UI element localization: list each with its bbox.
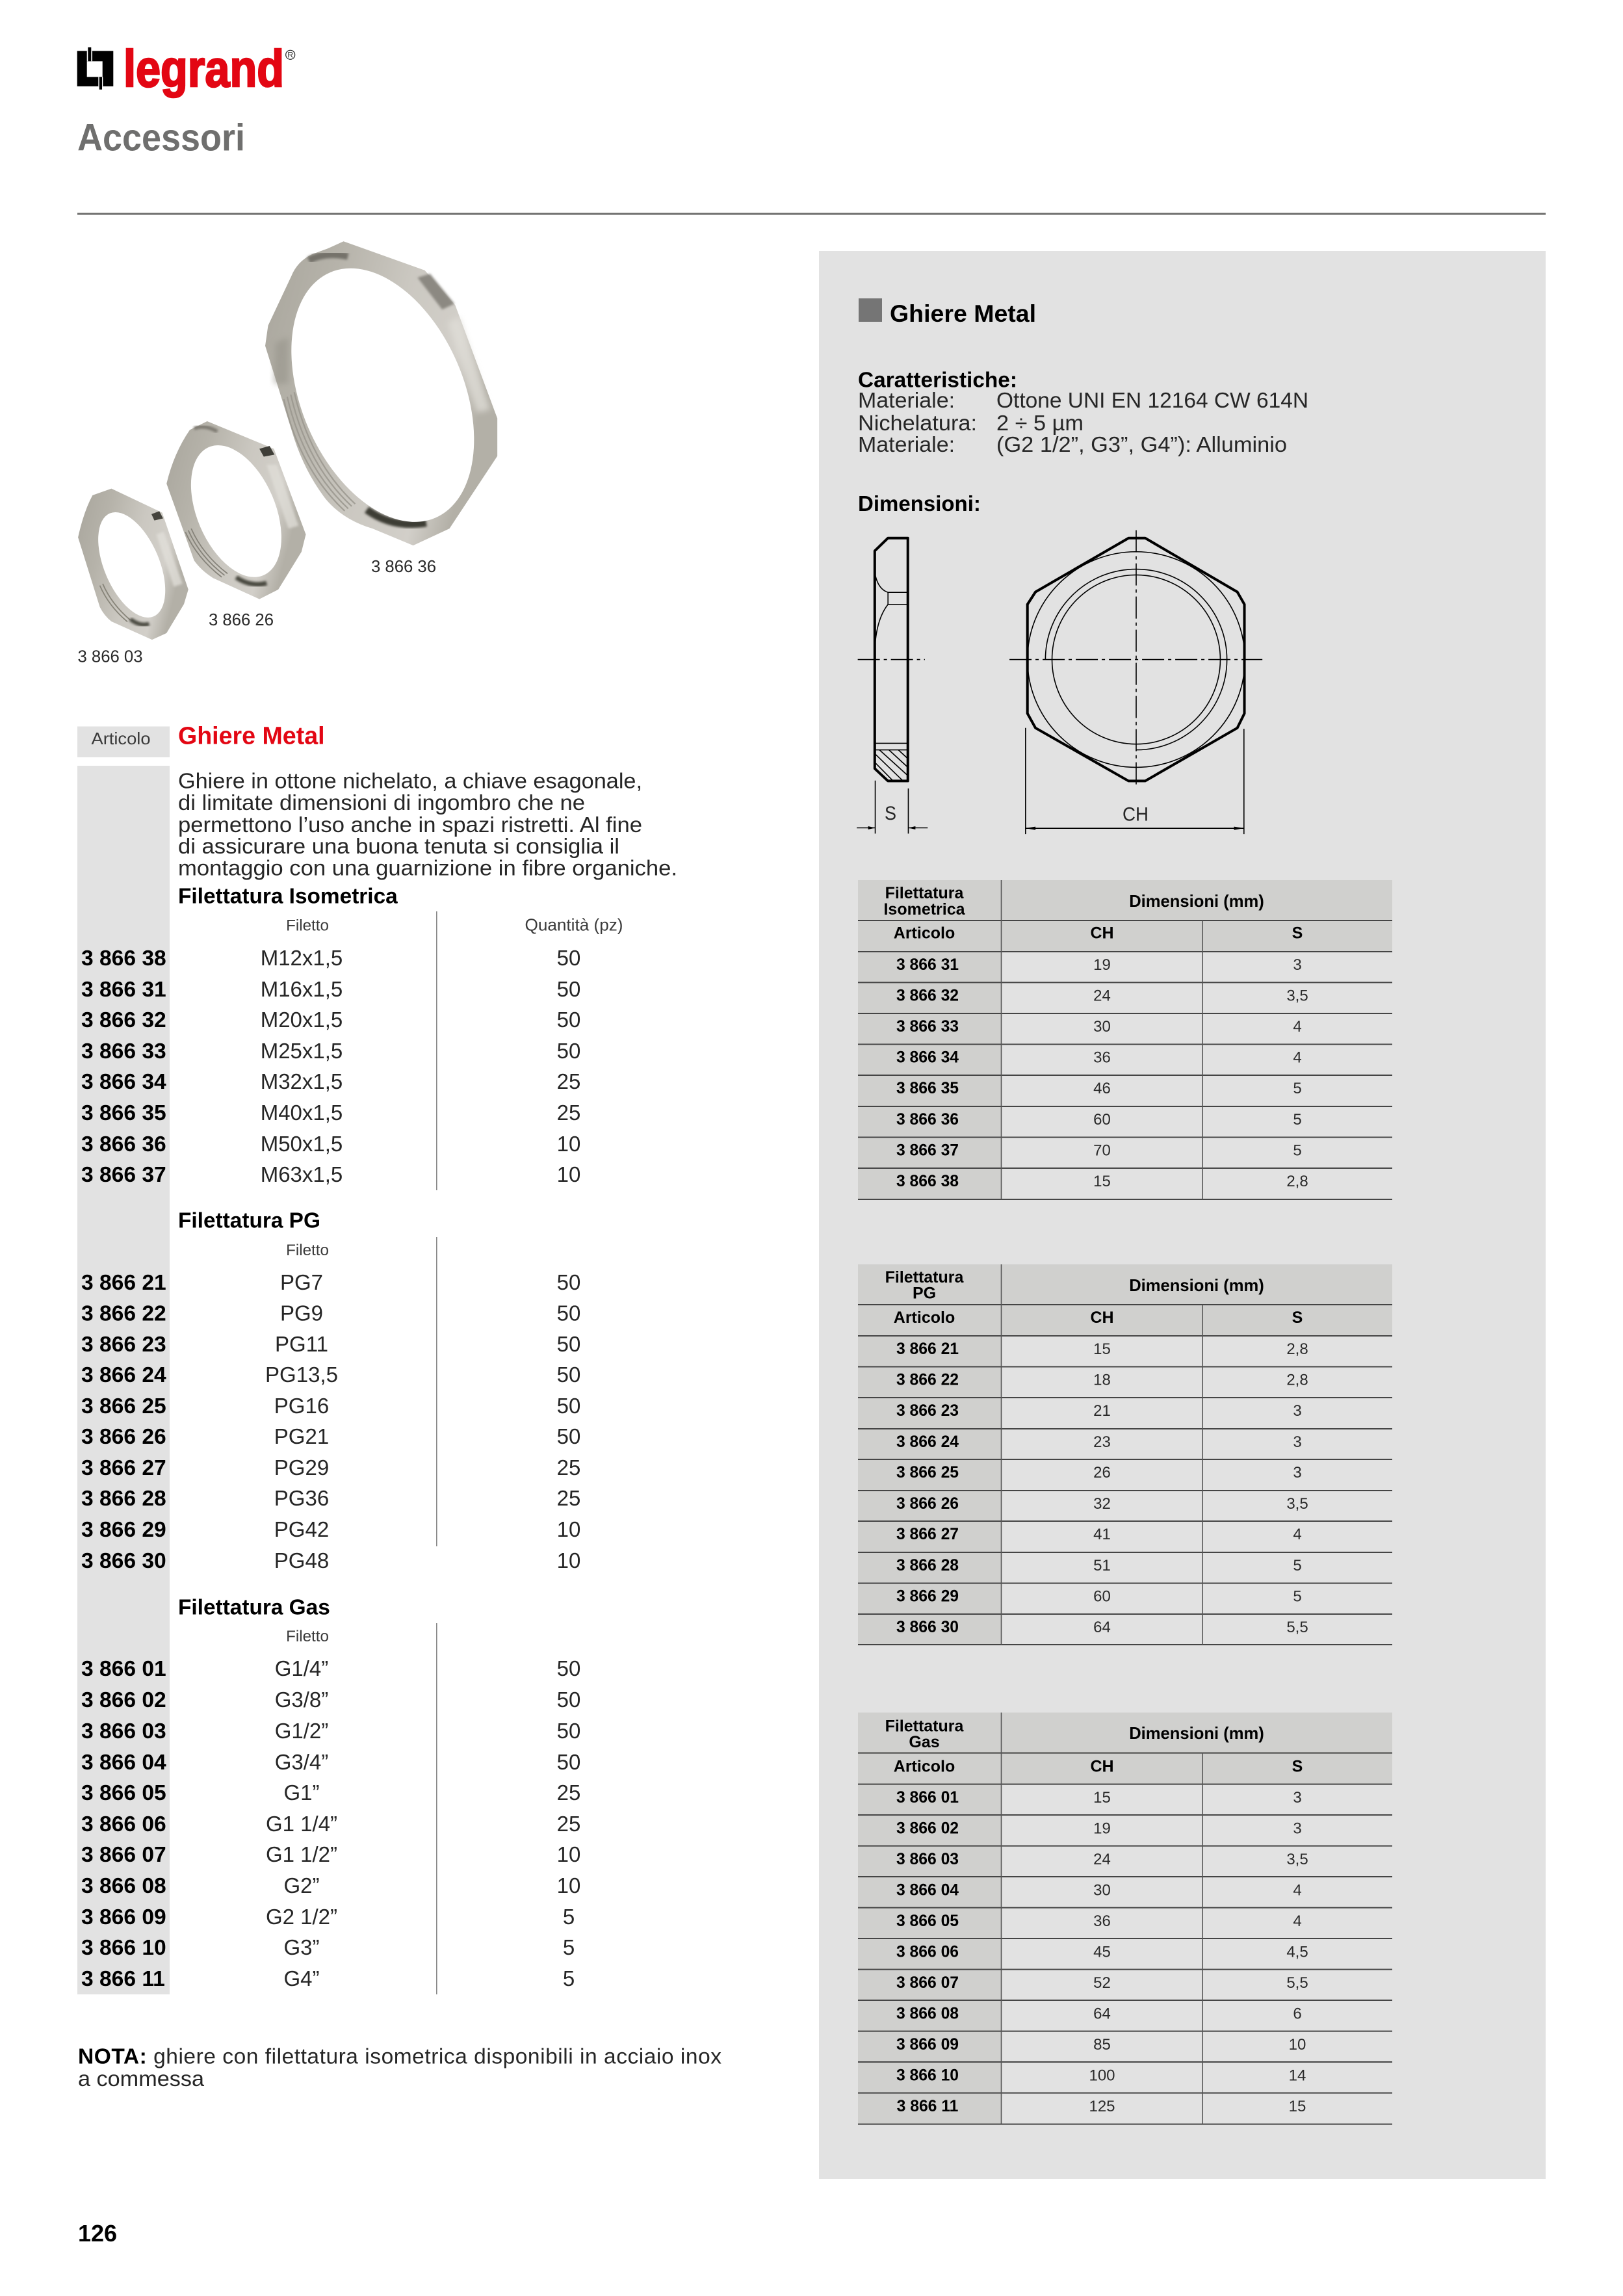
table rows: 19 (1093, 1820, 1111, 1837)
logo wordmark: legrand (123, 40, 284, 98)
table rows: 3 866 03 (896, 1851, 959, 1868)
row: 50 (557, 1656, 580, 1680)
row: 10 (557, 1873, 580, 1898)
row: PG13,5 (265, 1363, 338, 1387)
row: 3 866 33 (81, 1039, 166, 1063)
small nut (78, 489, 188, 640)
table rows: 3 866 10 (896, 2067, 959, 2084)
row: 3 866 26 (81, 1425, 166, 1449)
photo label: 3 866 03: 3 866 03 (78, 647, 143, 666)
table: Filettatura PG (858, 1264, 1392, 1645)
table rows: 3 866 32 (896, 987, 959, 1005)
characteristics text (858, 368, 1308, 456)
table rows: 3 866 09 (896, 2036, 959, 2054)
row: 3 866 30 (81, 1549, 166, 1573)
table header: Articolo (894, 1758, 955, 1776)
row: 3 866 09 (81, 1905, 166, 1929)
characteristics text: 2 ÷ 5 µm (996, 411, 1084, 435)
table rows: 30 (1093, 1881, 1111, 1899)
table rows: 3 (1293, 1820, 1302, 1837)
characteristics text: Ottone UNI EN 12164 CW 614N (996, 388, 1308, 412)
table rows: 3 866 24 (896, 1433, 959, 1451)
table: Filettatura Isometrica (858, 880, 1392, 1199)
row: 25 (557, 1486, 580, 1510)
table rows (896, 956, 1308, 1190)
row (81, 1008, 580, 1032)
table header (885, 1268, 1303, 1327)
row: G3/4” (275, 1750, 328, 1774)
table rows: 51 (1093, 1557, 1111, 1574)
dimension label: CH: CH (1123, 803, 1149, 826)
table header: S (1292, 924, 1303, 943)
table rows: 3 866 29 (896, 1587, 959, 1606)
table rows: 3,5 (1286, 1495, 1308, 1513)
row: 10 (557, 1132, 580, 1156)
table rows: 3 866 01 (896, 1789, 959, 1807)
table header: PG (913, 1285, 936, 1303)
row: 50 (557, 1270, 580, 1294)
table rows: 3 866 31 (896, 956, 959, 974)
table rows: 32 (1093, 1495, 1111, 1513)
table rows: 21 (1093, 1402, 1111, 1420)
row (81, 1517, 580, 1542)
row: 3 866 32 (81, 1008, 166, 1032)
heading: Accessori: Accessori (77, 117, 245, 159)
table rows: 5 (1293, 1080, 1302, 1097)
row: 3 866 07 (81, 1843, 166, 1867)
characteristics text: (G2 1/2”, G3”, G4”): Alluminio (996, 432, 1287, 456)
row: 3 866 23 (81, 1333, 166, 1357)
description text: Ghiere in ottone nichelato, a chiave esagonale, (178, 770, 642, 793)
section: Filettatura Gas (81, 1596, 580, 1994)
logo: legrand (77, 40, 295, 98)
row: 50 (557, 977, 580, 1001)
row: 10 (557, 1548, 580, 1572)
description text: montaggio con una guarnizione in fibre organiche. (178, 857, 677, 880)
heading: Ghiere Metal (red): Ghiere Metal (178, 722, 325, 749)
row (81, 1966, 575, 1991)
table header: CH (1090, 1758, 1114, 1776)
row: G3” (283, 1935, 320, 1959)
table rows: 14 (1289, 2067, 1306, 2084)
table rows: 4 (1293, 1912, 1302, 1930)
table rows: 3 866 37 (896, 1141, 959, 1160)
table rows: 3 866 25 (896, 1464, 959, 1481)
row: 3 866 34 (81, 1070, 166, 1094)
row (81, 1039, 580, 1063)
characteristics text: Nichelatura: (858, 411, 977, 435)
row: PG29 (274, 1455, 329, 1480)
row: PG11 (275, 1332, 328, 1356)
row: M32x1,5 (261, 1069, 343, 1093)
table rows: 15 (1289, 2098, 1306, 2115)
table rows: 70 (1093, 1141, 1111, 1160)
registered mark: R (287, 51, 293, 60)
row: 3 866 01 (81, 1657, 166, 1681)
table rows: 3 866 34 (896, 1049, 959, 1066)
row (81, 1486, 580, 1511)
row: G2” (283, 1873, 320, 1898)
row: 50 (557, 1424, 580, 1448)
table rows: 5 (1293, 1111, 1302, 1128)
column header: Filetto: Filetto (286, 1628, 329, 1645)
table rows: 52 (1093, 1974, 1111, 1992)
note: a commessa (78, 2067, 204, 2091)
table: Filettatura Gas (858, 1712, 1392, 2124)
section: Filettatura PG (81, 1209, 580, 1573)
table rows: 3 866 27 (896, 1526, 959, 1543)
row: G4” (283, 1966, 320, 1990)
table rows: 4 (1293, 1018, 1302, 1036)
row (81, 1363, 580, 1387)
row: 3 866 10 (81, 1936, 166, 1960)
table rows: 3 (1293, 1464, 1302, 1481)
row (81, 1750, 580, 1775)
table rows: 3 866 36 (896, 1111, 959, 1128)
table rows: 3 866 23 (896, 1402, 959, 1420)
row (81, 1301, 580, 1326)
table rows: 23 (1093, 1433, 1111, 1451)
table header: CH (1090, 924, 1114, 943)
row (81, 1101, 580, 1125)
table rows: 4 (1293, 1881, 1302, 1899)
table header: Filettatura (885, 1717, 965, 1736)
note (78, 2045, 721, 2091)
row: M16x1,5 (261, 977, 343, 1001)
row: 3 866 28 (81, 1487, 166, 1511)
row (81, 1873, 580, 1898)
row: 3 866 11 (81, 1967, 165, 1991)
row: 50 (557, 1332, 580, 1356)
row: 50 (557, 1363, 580, 1387)
row (81, 1781, 580, 1805)
row: M50x1,5 (261, 1132, 343, 1156)
row: 50 (557, 1039, 580, 1063)
table rows: 24 (1093, 1851, 1111, 1868)
table header: S (1292, 1309, 1303, 1327)
table rows: 3 866 07 (896, 1974, 959, 1992)
table rows: 5 (1293, 1141, 1302, 1160)
table rows: 10 (1289, 2036, 1306, 2054)
row: PG42 (274, 1517, 329, 1541)
icon: legrand square mark (77, 47, 113, 90)
table header: Dimensioni (mm) (1129, 1725, 1264, 1743)
row: 3 866 21 (81, 1271, 166, 1295)
row (81, 1935, 575, 1960)
table rows: 3 866 04 (896, 1881, 959, 1899)
table rows: 3 866 02 (896, 1820, 959, 1837)
row: 25 (557, 1781, 580, 1805)
section heading: Filettatura Gas (178, 1596, 330, 1620)
table header: Dimensioni (mm) (1129, 1277, 1264, 1295)
row: 25 (557, 1455, 580, 1480)
registered mark (286, 50, 295, 60)
row: G1/4” (275, 1656, 328, 1680)
row: G1/2” (275, 1719, 328, 1743)
table rows: 3 866 38 (896, 1173, 959, 1190)
section heading: Filettatura PG (178, 1209, 320, 1233)
row: 3 866 22 (81, 1301, 166, 1326)
table rows: 3 (1293, 1789, 1302, 1807)
row (81, 1132, 580, 1156)
table rows: 3 866 22 (896, 1372, 959, 1389)
table rows: 5 (1293, 1587, 1302, 1606)
table rows: 2,8 (1286, 1372, 1308, 1389)
table rows: 3,5 (1286, 987, 1308, 1005)
table rows: 125 (1089, 2098, 1115, 2115)
row: 10 (557, 1842, 580, 1866)
table rows: 4 (1293, 1049, 1302, 1066)
photo label: 3 866 36: 3 866 36 (371, 558, 436, 576)
row (81, 1455, 580, 1480)
section heading: Filettatura Isometrica (178, 884, 398, 909)
table rows: 30 (1093, 1018, 1111, 1036)
photo label: 3 866 26: 3 866 26 (209, 611, 274, 629)
table rows: 85 (1093, 2036, 1111, 2054)
table rows: 15 (1093, 1173, 1111, 1190)
table header: Gas (909, 1733, 940, 1751)
table rows: 3 866 35 (896, 1080, 959, 1097)
table rows (896, 1340, 1308, 1636)
row: 25 (557, 1069, 580, 1093)
row: G1” (283, 1781, 320, 1805)
row (81, 1905, 575, 1929)
row: PG7 (280, 1270, 323, 1294)
table header: Isometrica (883, 900, 966, 919)
row: G3/8” (275, 1688, 328, 1712)
row: 3 866 37 (81, 1163, 166, 1187)
description text (178, 770, 677, 880)
row (81, 1394, 580, 1418)
table header: Filettatura (885, 1268, 965, 1286)
table rows: 24 (1093, 987, 1111, 1005)
table rows: 3 866 08 (896, 2005, 959, 2023)
row: 5 (563, 1966, 575, 1990)
row: 50 (557, 1008, 580, 1032)
table rows: 26 (1093, 1464, 1111, 1481)
row: 50 (557, 1688, 580, 1712)
article header box (77, 727, 170, 757)
table header: Filettatura (885, 884, 965, 902)
column header: Filetto: Filetto (286, 917, 329, 935)
column header: Quantità: Quantità (pz) (525, 915, 623, 935)
table header: Articolo (894, 1309, 955, 1327)
row: 50 (557, 946, 580, 970)
article header box: Articolo (91, 729, 151, 748)
table rows: 4 (1293, 1526, 1302, 1543)
row: 50 (557, 1750, 580, 1774)
row: PG16 (274, 1394, 329, 1418)
table rows: 2,8 (1286, 1173, 1308, 1190)
row (81, 1548, 580, 1573)
table rows: 36 (1093, 1912, 1111, 1930)
table header: CH (1090, 1309, 1114, 1327)
row: G1 1/4” (266, 1812, 337, 1836)
row: 3 866 31 (81, 978, 166, 1002)
table rows: 3 866 30 (896, 1619, 959, 1636)
row: 25 (557, 1812, 580, 1836)
table rows: 60 (1093, 1587, 1111, 1606)
row (81, 1719, 580, 1743)
description text: di limitate dimensioni di ingombro che ne (178, 791, 585, 815)
dimension label: S: S (885, 803, 896, 824)
panel heading: Ghiere Metal (890, 300, 1036, 327)
row: 3 866 35 (81, 1101, 166, 1125)
row: 3 866 25 (81, 1394, 166, 1418)
large nut (255, 241, 510, 550)
diagram: side view of nut (857, 538, 928, 833)
row: 5 (563, 1935, 575, 1959)
table rows: 100 (1089, 2067, 1115, 2084)
table rows: 3 (1293, 956, 1302, 974)
table rows: 3 866 21 (896, 1340, 959, 1358)
row (81, 1162, 580, 1187)
row (81, 1656, 580, 1681)
row (81, 1842, 580, 1867)
column header: Filetto: Filetto (286, 1242, 329, 1259)
table rows: 3,5 (1286, 1851, 1308, 1868)
characteristics text: Caratteristiche: (858, 368, 1017, 391)
panel: technical data (819, 251, 1546, 2179)
row: G1 1/2” (266, 1842, 337, 1866)
row (81, 977, 580, 1002)
row: M12x1,5 (261, 946, 343, 970)
row (81, 946, 580, 971)
row: M40x1,5 (261, 1101, 343, 1125)
row: 10 (557, 1517, 580, 1541)
table rows: 3 866 06 (896, 1944, 959, 1961)
table rows: 5,5 (1286, 1974, 1308, 1992)
table rows: 64 (1093, 2005, 1111, 2023)
row: 3 866 03 (81, 1719, 166, 1743)
table rows: 36 (1093, 1049, 1111, 1066)
table rows: 64 (1093, 1619, 1111, 1636)
product photo: three metal lock nuts (78, 241, 510, 640)
row (81, 1424, 580, 1449)
row: 3 866 05 (81, 1781, 166, 1805)
article code column background (77, 766, 170, 1994)
row: 3 866 36 (81, 1132, 166, 1156)
characteristics text: Materiale: (858, 388, 955, 412)
heading: Dimensioni: Dimensioni: (858, 491, 981, 515)
row: 3 866 38 (81, 946, 166, 971)
icon: grey square bullet (859, 298, 882, 322)
table rows (896, 1789, 1308, 2115)
table rows: 15 (1093, 1789, 1111, 1807)
table rows: 3 866 28 (896, 1557, 959, 1574)
row (81, 1270, 580, 1295)
table rows: 3 (1293, 1433, 1302, 1451)
row (81, 1332, 580, 1357)
table header (883, 884, 1303, 943)
table rows: 15 (1093, 1340, 1111, 1358)
table rows: 3 866 26 (896, 1495, 959, 1513)
row: PG21 (274, 1424, 329, 1448)
row (81, 1812, 580, 1836)
section: Filettatura Isometrica (81, 884, 623, 1190)
table rows: 3 866 11 (897, 2098, 959, 2115)
table header: S (1292, 1758, 1303, 1776)
table rows: 3 (1293, 1402, 1302, 1420)
row (81, 1069, 580, 1094)
row: 3 866 08 (81, 1874, 166, 1898)
row: 3 866 04 (81, 1751, 166, 1775)
table rows: 3 866 33 (896, 1018, 959, 1036)
description text: di assicurare una buona tenuta si consiglia il (178, 835, 619, 859)
characteristics text: Materiale: (858, 432, 955, 456)
table rows: 5 (1293, 1557, 1302, 1574)
note: NOTA: ghiere con filettatura isometrica disponibili in acciaio inox (78, 2045, 721, 2068)
row: 3 866 24 (81, 1363, 166, 1387)
table rows: 41 (1093, 1526, 1111, 1543)
table header: Articolo (894, 924, 955, 943)
row: G2 1/2” (266, 1905, 337, 1929)
row: 3 866 27 (81, 1456, 166, 1480)
table rows: 3 866 05 (896, 1912, 959, 1930)
table header (885, 1717, 1303, 1776)
row: M25x1,5 (261, 1039, 343, 1063)
table header: Dimensioni (mm) (1129, 893, 1264, 911)
row: 3 866 06 (81, 1812, 166, 1836)
row: 10 (557, 1162, 580, 1186)
table rows: 45 (1093, 1944, 1111, 1961)
row: PG48 (274, 1548, 329, 1572)
row: 3 866 02 (81, 1688, 166, 1712)
row: 3 866 29 (81, 1518, 166, 1542)
row: M20x1,5 (261, 1008, 343, 1032)
table rows: 46 (1093, 1080, 1111, 1097)
table rows: 18 (1093, 1372, 1111, 1389)
row: PG9 (280, 1301, 323, 1325)
table rows: 5,5 (1286, 1619, 1308, 1636)
table rows: 60 (1093, 1111, 1111, 1128)
table rows: 6 (1293, 2005, 1302, 2023)
row: M63x1,5 (261, 1162, 343, 1186)
row: PG36 (274, 1486, 329, 1510)
description text: permettono l’uso anche in spazi ristretti. Al fine (178, 813, 642, 837)
table rows: 2,8 (1286, 1340, 1308, 1358)
diagram: front view of nut (1009, 530, 1262, 834)
row: 50 (557, 1301, 580, 1325)
row (81, 1688, 580, 1712)
medium nut (166, 421, 306, 599)
row: 50 (557, 1394, 580, 1418)
table rows: 4,5 (1286, 1944, 1308, 1961)
row: 25 (557, 1101, 580, 1125)
row: 5 (563, 1905, 575, 1929)
page number: 126 (78, 2220, 117, 2247)
row: 50 (557, 1719, 580, 1743)
table rows: 19 (1093, 956, 1111, 974)
